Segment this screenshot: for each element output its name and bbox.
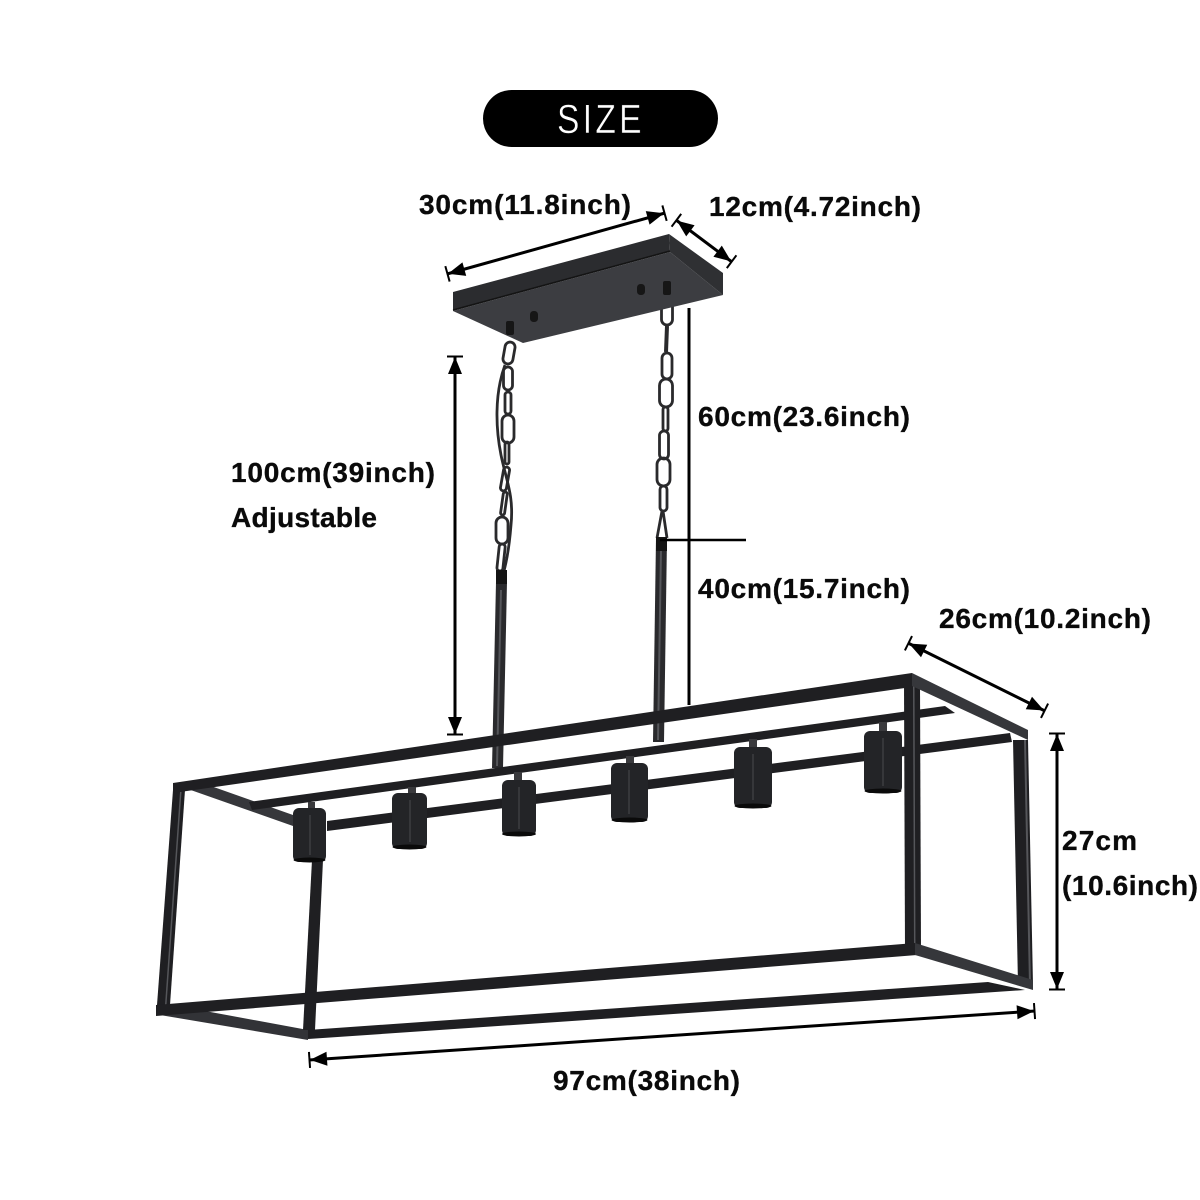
lamp holders <box>293 722 902 862</box>
dimension arrows <box>309 213 1057 1060</box>
dimension labels: 12cm(4.72inch) <box>709 191 921 222</box>
lamp 6 <box>864 722 902 794</box>
dimension labels: 97cm(38inch) <box>553 1065 740 1096</box>
rear frame bars <box>160 706 1033 1040</box>
dimension labels: 27cm <box>1062 825 1137 856</box>
dimension labels: Adjustable <box>231 502 377 533</box>
dimension labels: 60cm(23.6inch) <box>698 401 910 432</box>
dimension labels: 26cm(10.2inch) <box>939 603 1151 634</box>
line: 60cm and 40cm drop <box>688 308 690 705</box>
suspension rods <box>492 537 667 768</box>
arrow: canopy width <box>676 220 732 262</box>
front frame bars <box>156 673 1033 1016</box>
arrow: frame length <box>309 1011 1035 1060</box>
lamp 5 <box>734 739 772 808</box>
lamp 4 <box>611 756 648 822</box>
title badge: SIZE <box>557 96 645 142</box>
arrow: canopy length <box>447 213 665 274</box>
title badge <box>483 90 718 147</box>
lamp 3 <box>502 772 536 836</box>
arrow: frame depth <box>908 643 1045 711</box>
lamp 1 <box>293 802 326 862</box>
dimension labels: (10.6inch) <box>1062 870 1198 901</box>
dimension labels: 100cm(39inch) <box>231 457 435 488</box>
line: chain and rod divider <box>660 539 746 541</box>
dimension labels: 40cm(15.7inch) <box>698 573 910 604</box>
dimension labels <box>231 189 1198 1096</box>
lamp 2 <box>392 787 427 850</box>
arrow: adjustable height <box>454 356 456 735</box>
ceiling canopy <box>453 234 723 343</box>
hanging chains <box>496 295 672 582</box>
dimension labels: 30cm(11.8inch) <box>419 189 631 220</box>
arrow: frame height <box>1056 733 1058 990</box>
